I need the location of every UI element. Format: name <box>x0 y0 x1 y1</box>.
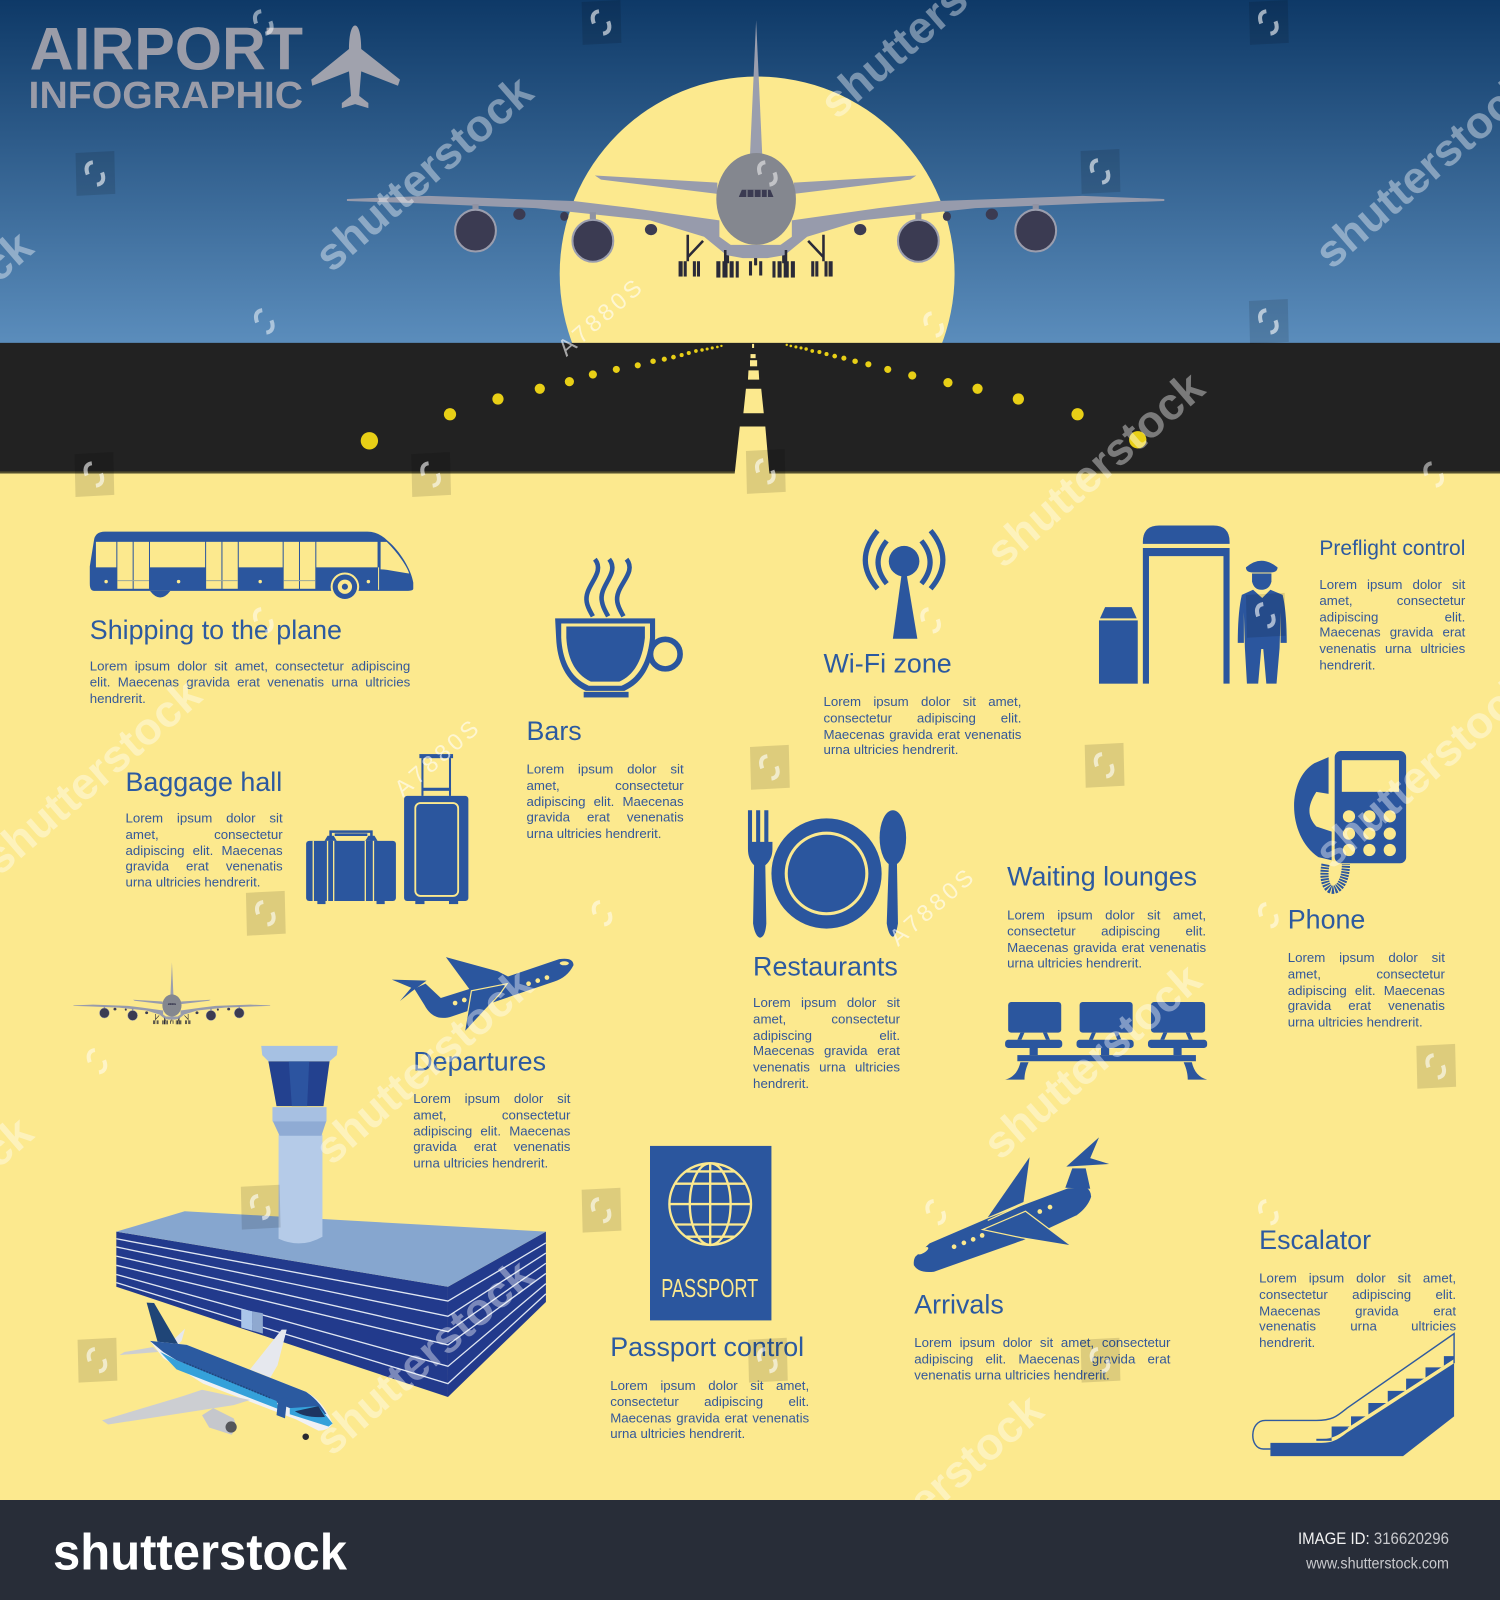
control tower <box>261 1046 338 1243</box>
title <box>29 15 303 116</box>
text block: Maecenas gravida erat <box>1259 1303 1456 1318</box>
text block: amet, consectetur <box>126 826 283 842</box>
text block: venenatis urna ultricies hendrerit. <box>914 1367 1110 1382</box>
text block <box>413 1091 570 1171</box>
title: INFOGRAPHIC <box>29 74 303 116</box>
icon: passport: PASSPORT <box>661 1275 758 1303</box>
panel: preflight control <box>1098 526 1466 684</box>
panel: passport control <box>610 1146 809 1441</box>
text block: Maecenas gravida erat venenatis <box>823 726 1021 741</box>
icon: luggage <box>306 754 468 904</box>
icon: telephone <box>1294 751 1406 894</box>
text block: urna ultricies hendrerit. <box>610 1426 745 1441</box>
title: AIRPORT <box>30 15 303 82</box>
header scene: sky, sun, airliner and runway <box>0 0 1500 474</box>
stock watermark overlay: shutterstock <box>973 953 1211 1169</box>
image id: IMAGE ID: 316620296 <box>1298 1530 1449 1548</box>
text block: adipiscing elit. Maecenas <box>413 1123 570 1138</box>
airliner front view <box>347 20 1164 278</box>
text block <box>914 1335 1170 1382</box>
heading: Waiting lounges <box>1007 861 1197 892</box>
text block: urna ultricies hendrerit. <box>413 1155 548 1171</box>
text block <box>1319 577 1466 672</box>
heading: Escalator <box>1259 1224 1371 1255</box>
heading: Shipping to the plane <box>90 614 342 645</box>
text block: venenatis urna ultricies <box>1259 1319 1456 1334</box>
text block: Lorem ipsum dolor sit <box>1319 577 1465 592</box>
text block <box>1007 907 1206 971</box>
text block: adipiscing elit. Maecenas <box>126 842 283 858</box>
text block <box>126 810 283 890</box>
text block: consectetur adipiscing elit. <box>823 710 1021 725</box>
text block <box>527 761 684 841</box>
text block: adipiscing elit. Maecenas gravida erat <box>914 1351 1170 1366</box>
text block: amet, consectetur <box>753 1011 900 1026</box>
icon: departing plane <box>392 957 574 1031</box>
stock watermark overlay: A7880S <box>389 715 483 802</box>
text block: Lorem ipsum dolor sit <box>753 995 900 1010</box>
text block: elit. Maecenas gravida erat venenatis urna ultricies <box>90 674 410 690</box>
panel: phone <box>1288 751 1445 1030</box>
terminal and control tower illustration <box>102 1046 546 1440</box>
stock watermark overlay: shutterstock <box>305 65 542 281</box>
text block: amet, consectetur <box>1288 966 1445 981</box>
heading: Bars <box>527 715 582 746</box>
text block: Maecenas gravida erat venenatis <box>610 1410 809 1425</box>
heading: Phone <box>1288 904 1365 935</box>
sky <box>0 0 1500 344</box>
text block: adipiscing elit. Maecenas <box>527 793 684 809</box>
panel: departures <box>392 957 574 1171</box>
text block: Lorem ipsum dolor sit amet, consectetur adipiscing <box>90 658 410 673</box>
panel: baggage hall <box>126 754 468 904</box>
heading: Wi-Fi zone <box>823 648 952 679</box>
runway <box>0 343 1500 473</box>
text block: amet, consectetur <box>1319 593 1465 608</box>
parked airliner <box>102 1303 333 1440</box>
panel: shipping to the plane <box>90 532 414 706</box>
text block: adipiscing elit. <box>1319 609 1465 624</box>
terminal building <box>116 1211 546 1397</box>
stock watermark overlay: shutterstock <box>976 361 1214 577</box>
icon: waiting seats <box>1005 1002 1208 1080</box>
heading: Passport control <box>610 1332 804 1362</box>
text block: Lorem ipsum dolor sit <box>413 1091 570 1106</box>
icon: wi-fi mast <box>862 529 946 639</box>
panel: restaurants <box>748 810 906 1091</box>
text block: gravida erat venenatis <box>126 859 283 874</box>
text block: hendrerit. <box>1259 1335 1315 1350</box>
text block: Lorem ipsum dolor sit <box>527 761 684 777</box>
text block: Maecenas gravida erat <box>753 1043 900 1059</box>
text block: hendrerit. <box>1319 657 1375 672</box>
footer bar <box>0 1500 1500 1600</box>
heading: Arrivals <box>914 1289 1004 1319</box>
text block: urna ultricies hendrerit. <box>126 875 260 890</box>
text block: gravida erat venenatis <box>1288 998 1445 1014</box>
stock watermark overlay: shutterstock <box>305 958 542 1174</box>
panel: bars <box>527 558 684 841</box>
stock watermark overlay: shutterstock <box>815 1383 1053 1599</box>
text block: adipiscing elit. Maecenas <box>1288 982 1445 998</box>
icon: apron bus <box>90 532 414 599</box>
heading: Preflight control <box>1319 537 1465 560</box>
text block <box>1259 1270 1456 1350</box>
text block: consectetur adipiscing elit. <box>1259 1287 1456 1302</box>
text block: Lorem ipsum dolor sit <box>126 810 283 826</box>
icon: escalator <box>1252 1332 1455 1456</box>
text block: amet, consectetur <box>527 777 684 793</box>
heading: Departures <box>413 1046 546 1077</box>
text block: Lorem ipsum dolor sit amet, <box>1259 1270 1456 1286</box>
text block: amet, consectetur <box>413 1107 570 1122</box>
text block: urna ultricies hendrerit. <box>823 742 958 758</box>
text block: venenatis urna ultricies <box>753 1059 900 1075</box>
text block: urna ultricies hendrerit. <box>1007 956 1142 971</box>
small airliner illustration <box>74 963 270 1024</box>
text block: Maecenas gravida erat venenatis <box>1007 939 1206 955</box>
sun <box>560 76 955 343</box>
text block: consectetur adipiscing elit. <box>1007 923 1206 939</box>
text block: venenatis urna ultricies <box>1319 641 1465 656</box>
text block <box>823 694 1021 758</box>
text block: Lorem ipsum dolor sit amet, <box>1007 907 1206 922</box>
icon: security gate and officer <box>1098 526 1287 684</box>
icon: landing plane <box>914 1138 1109 1272</box>
stock watermark overlay: A7880S <box>884 864 978 951</box>
icon: plate and cutlery <box>748 810 906 938</box>
text block <box>1288 950 1445 1030</box>
icon: title airplane <box>311 26 400 108</box>
icon: passport <box>650 1146 772 1320</box>
text block: gravida erat venenatis <box>527 810 684 825</box>
text block: adipiscing elit. <box>753 1027 900 1042</box>
text block: urna ultricies hendrerit. <box>1288 1014 1423 1030</box>
heading: Restaurants <box>753 951 898 982</box>
text block: consectetur adipiscing elit. <box>610 1394 809 1409</box>
text block: Lorem ipsum dolor sit <box>1288 950 1445 965</box>
text block <box>753 995 900 1091</box>
text block <box>90 658 410 706</box>
text block: gravida erat venenatis <box>413 1139 570 1154</box>
runway lights <box>361 344 1146 449</box>
panel: arrivals <box>914 1138 1170 1382</box>
panel: waiting lounges <box>1005 861 1208 1080</box>
text block: Maecenas gravida erat <box>1319 625 1465 640</box>
text block: Lorem ipsum dolor sit amet, <box>610 1378 809 1393</box>
stock watermark overlay: A7880S <box>553 274 647 361</box>
stock watermark overlay: shutterstock <box>305 1249 542 1465</box>
icon: coffee cup <box>555 558 683 698</box>
heading: Baggage hall <box>126 766 282 797</box>
panel: wi-fi zone <box>823 529 1021 758</box>
panel: escalator <box>1252 1224 1456 1456</box>
text block <box>610 1378 809 1441</box>
text block: hendrerit. <box>753 1075 809 1091</box>
website: www.shutterstock.com <box>1305 1555 1449 1572</box>
text block: hendrerit. <box>90 690 146 706</box>
footer logo: shutterstock <box>53 1523 348 1580</box>
text block: Lorem ipsum dolor sit amet, consectetur <box>914 1335 1170 1350</box>
text block: Lorem ipsum dolor sit amet, <box>823 694 1021 709</box>
text block: urna ultricies hendrerit. <box>527 826 661 841</box>
